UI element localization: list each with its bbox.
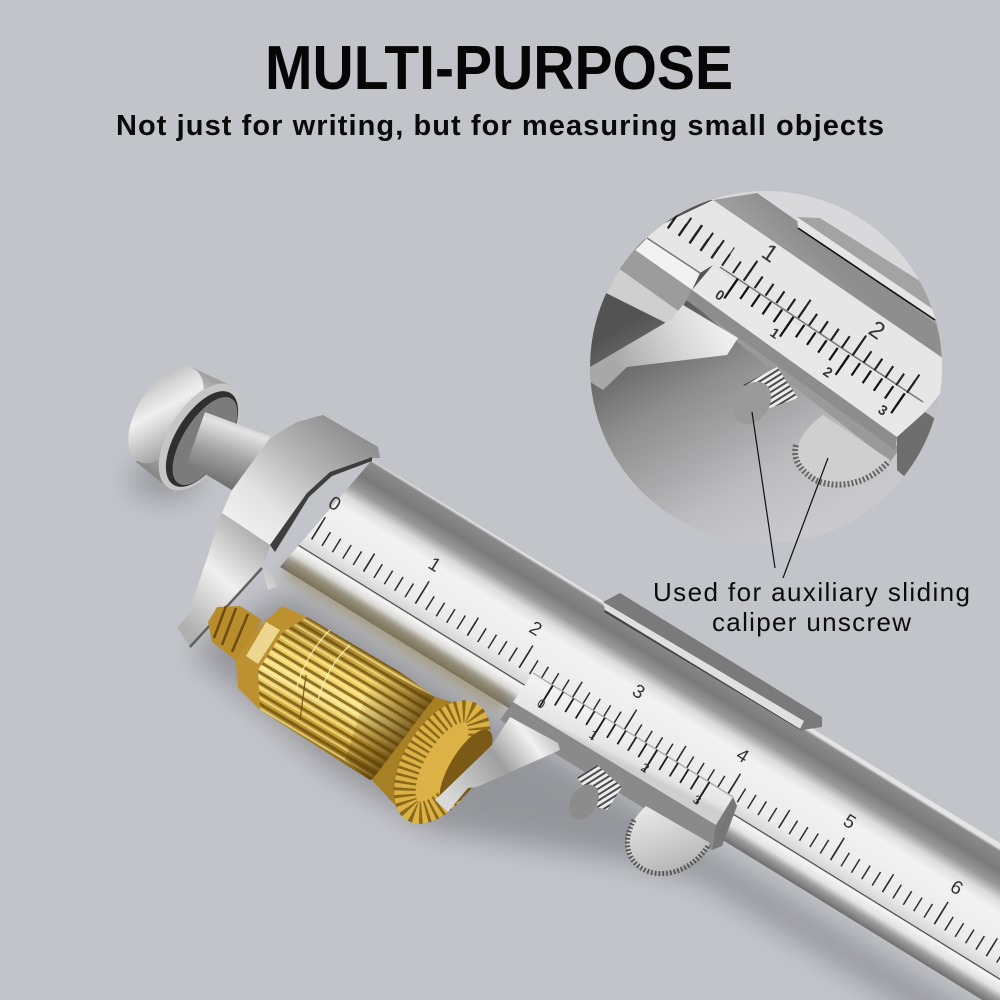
ruler numerals: 3 [628, 681, 648, 704]
head [372, 697, 455, 805]
brass reflection on body [283, 558, 510, 712]
title: MULTI-PURPOSE [265, 34, 733, 103]
inset vernier ticks [730, 285, 901, 404]
inset circle: close-up of the wheels [590, 191, 960, 543]
inset vernier numerals: 2 [820, 363, 836, 381]
sliding scale [500, 673, 737, 850]
clip on body [603, 593, 822, 731]
neck and cone [236, 606, 307, 710]
moving jaw [435, 717, 560, 812]
callout text: caliper unscrew [712, 607, 911, 637]
main scale ticks [315, 528, 1000, 995]
ruler numerals: 6 [946, 877, 966, 900]
vernier numerals: 2 [638, 760, 652, 776]
inset ruler face [640, 200, 960, 412]
callout text [653, 577, 970, 637]
ruler numerals: 1 [424, 554, 444, 577]
ruler numerals [324, 493, 966, 900]
inset knob [736, 367, 798, 424]
inset numerals: 2 [864, 316, 890, 345]
knurled barrel [258, 617, 435, 780]
ruler numerals: 0 [324, 493, 344, 516]
inset thumb wheel [795, 415, 890, 486]
inset vernier numerals [712, 286, 891, 419]
pointer lines to knob and wheel [752, 412, 828, 578]
ruler numerals: 5 [839, 811, 859, 834]
small knurled knob [563, 765, 622, 825]
inset background [712, 191, 919, 280]
inset main ticks [671, 219, 922, 393]
collar [222, 415, 380, 545]
vernier numerals: 0 [534, 696, 548, 712]
inset vernier numerals: 3 [875, 401, 891, 419]
subtitle: Not just for writing, but for measuring small objects [116, 110, 884, 142]
vernier numerals: 1 [586, 727, 600, 743]
ruler numerals: 4 [732, 745, 753, 768]
vernier numerals [534, 696, 704, 808]
inset vernier numerals: 0 [712, 286, 728, 304]
inset numerals [762, 246, 885, 340]
inset top band [714, 193, 942, 358]
inset lower rail, left of slider [600, 238, 700, 325]
brass fitting [208, 606, 510, 840]
inset clip [797, 217, 936, 324]
thumb wheel [627, 806, 710, 874]
inset vernier numerals: 1 [767, 324, 783, 342]
cap end: back cylinder [113, 354, 258, 504]
inset numerals: 1 [757, 239, 783, 268]
inset main ticks over slider [747, 270, 923, 393]
vernier ticks [545, 692, 706, 794]
drop shadow under the caliper pen [129, 462, 1000, 1000]
vernier numerals: 3 [690, 792, 704, 808]
inset jaw [590, 305, 738, 390]
callout text: Used for auxiliary sliding [653, 577, 970, 607]
fixed jaw [177, 513, 277, 647]
threaded tip [208, 606, 262, 662]
shaft [187, 412, 275, 498]
inset slider [686, 265, 934, 476]
caliper pen [113, 354, 1000, 1000]
main ruler body [280, 460, 1000, 1000]
ruler numerals: 2 [525, 618, 545, 641]
